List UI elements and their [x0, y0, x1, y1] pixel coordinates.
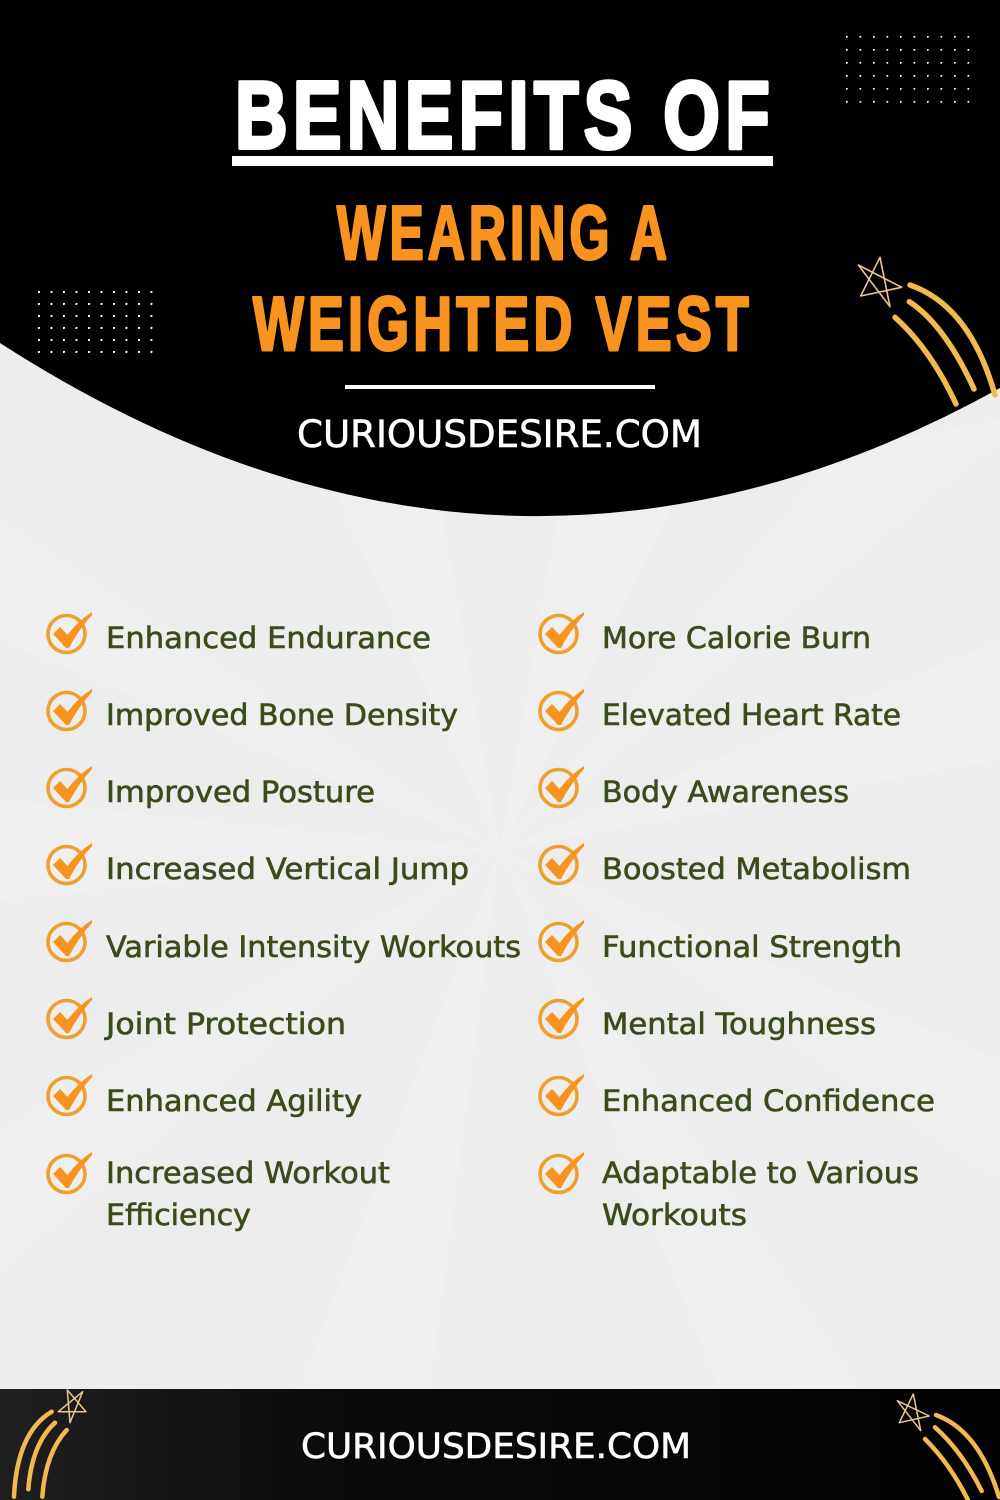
benefit: functional strength: [540, 920, 902, 964]
benefit: increased vertical jump: [48, 843, 469, 886]
benefit: elevated heart rate: Elevated Heart Rate: [602, 698, 901, 732]
title: benefits of: BENEFITS OF: [235, 62, 775, 169]
benefit: mental toughness: Mental Toughness: [602, 1007, 876, 1041]
benefit: body awareness: [540, 766, 849, 809]
benefit: enhanced endurance: Enhanced Endurance: [106, 621, 431, 655]
benefit: increased vertical jump: Increased Vertical Jump: [106, 852, 469, 886]
benefit: improved posture: [48, 766, 375, 809]
icon: shooting star bottom right: [897, 1394, 999, 1500]
dot pattern: left: [37, 290, 153, 354]
benefit: functional strength: Functional Strength: [602, 930, 902, 964]
benefit: boosted metabolism: [540, 843, 911, 886]
benefit: increased workout efficiency: Increased Workout: [106, 1156, 390, 1190]
benefit: body awareness: Body Awareness: [602, 775, 849, 809]
benefit: improved posture: Improved Posture: [106, 775, 375, 809]
title underline: [232, 156, 773, 166]
benefit: adaptable to various workouts: Workouts: [602, 1198, 747, 1232]
footer bar: [0, 1389, 1000, 1500]
icon: shooting star bottom left: [14, 1390, 86, 1497]
benefit: mental toughness: [540, 997, 876, 1041]
benefit: enhanced endurance: [48, 612, 431, 655]
header panel: black curved shape: [0, 0, 1000, 516]
benefit: joint protection: Joint Protection: [104, 1007, 346, 1041]
benefit: variable intensity workouts: Variable Intensity Workouts: [106, 930, 521, 964]
benefit: variable intensity workouts: [48, 920, 521, 964]
benefit: adaptable to various workouts: Adaptable to Various: [602, 1156, 919, 1190]
title: weighted vest: WEIGHTED VEST: [253, 282, 753, 367]
benefit: adaptable to various workouts: [540, 1152, 919, 1232]
benefit: improved bone density: [48, 689, 458, 732]
benefit: increased workout efficiency: Efficiency: [106, 1198, 251, 1232]
benefits list: left column: [48, 612, 521, 1232]
icon: shooting star top right: [858, 257, 995, 404]
footer website text: CURIOUSDESIRE.COM: [301, 1427, 691, 1467]
benefit: more calorie burn: [540, 612, 871, 655]
benefit: enhanced agility: [48, 1074, 362, 1118]
benefit: elevated heart rate: [540, 689, 901, 732]
benefit: enhanced confidence: Enhanced Confidence: [602, 1084, 935, 1118]
benefit: more calorie burn: More Calorie Burn: [602, 621, 871, 655]
benefit: improved bone density: Improved Bone Density: [106, 698, 458, 732]
benefit: boosted metabolism: Boosted Metabolism: [602, 852, 911, 886]
benefit: enhanced confidence: [540, 1074, 935, 1118]
benefit: joint protection: [48, 997, 346, 1041]
header website text: CURIOUSDESIRE.COM: [297, 413, 702, 456]
benefit: enhanced agility: Enhanced Agility: [106, 1084, 362, 1118]
title: wearing a: WEARING A: [337, 191, 671, 276]
benefits list: right column: [540, 612, 935, 1232]
header divider line: [345, 385, 655, 389]
benefit: increased workout efficiency: [48, 1152, 390, 1232]
dot pattern: top right: [845, 35, 970, 103]
